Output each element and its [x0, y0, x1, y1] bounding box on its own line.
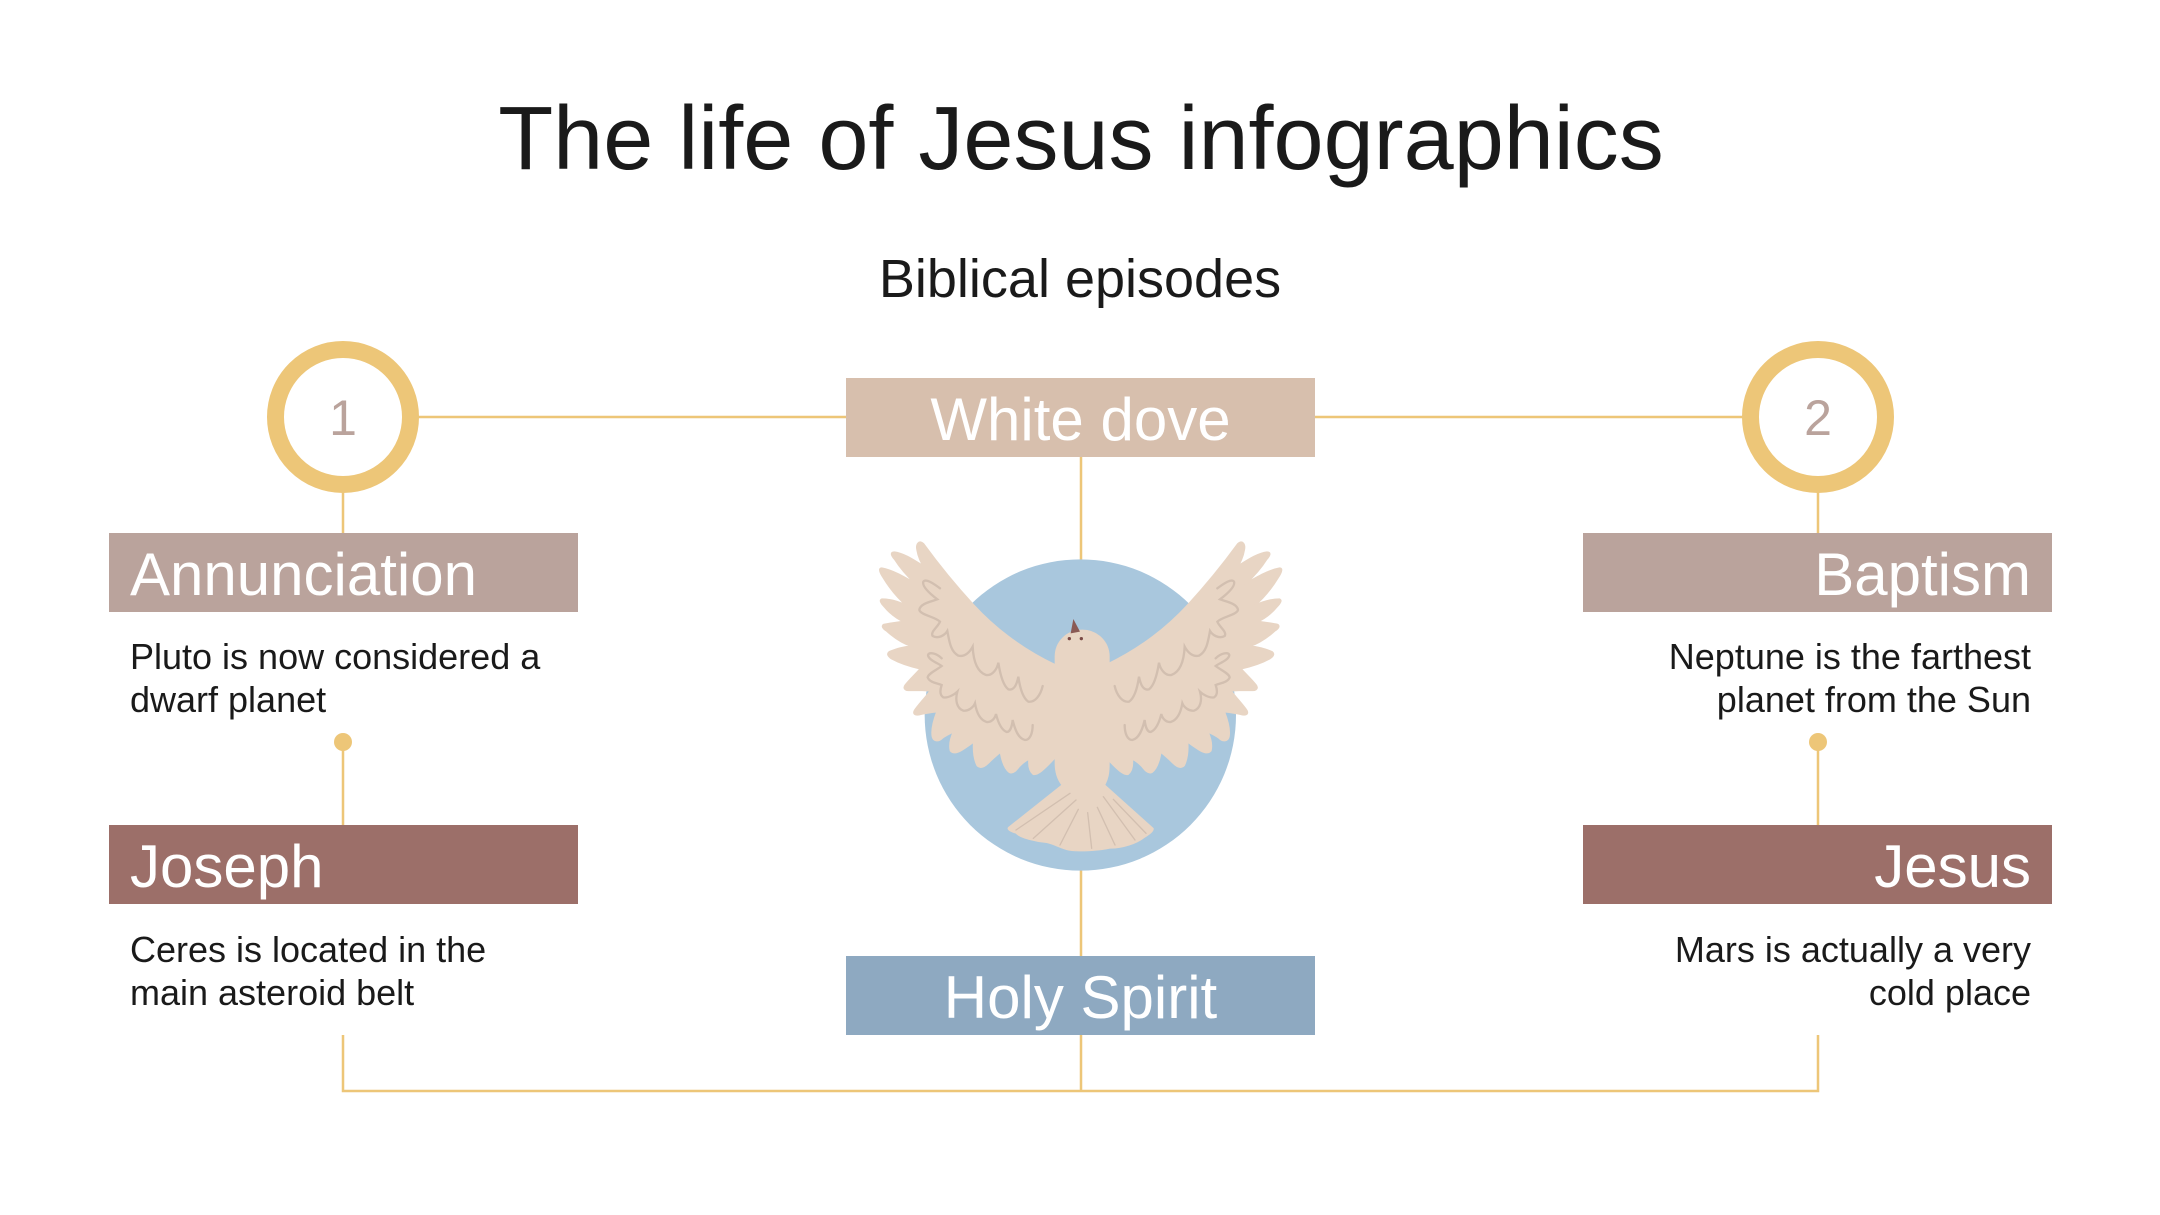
heading: Joseph: Joseph — [130, 833, 323, 900]
heading: Jesus: Jesus — [1874, 833, 2031, 900]
number 2: 2 — [1804, 390, 1832, 446]
text: Annunciation description: dwarf planet — [130, 679, 326, 720]
marker ring 2 — [1742, 341, 1894, 493]
number 1: 1 — [329, 390, 357, 446]
wing and tail feather lines — [919, 581, 1238, 848]
heading: Jesus — [1583, 825, 2052, 904]
heading: Baptism — [1583, 533, 2052, 612]
text: Baptism description: Neptune is the farthest — [1669, 636, 2031, 677]
heading: Annunciation — [109, 533, 578, 612]
text: Baptism description: planet from the Sun — [1717, 679, 2031, 720]
heading: Holy Spirit — [846, 956, 1315, 1035]
heading: White dove — [846, 378, 1315, 457]
heading: White dove: White dove — [930, 386, 1231, 453]
illustration: dove on blue circle — [879, 541, 1282, 871]
blue circle — [925, 559, 1236, 871]
text: Jesus description: cold place — [1869, 972, 2031, 1013]
text: Joseph description: main asteroid belt — [130, 972, 414, 1013]
text: Baptism description — [1669, 636, 2031, 720]
text: Joseph description — [130, 929, 486, 1013]
text: Jesus description: Mars is actually a very — [1675, 929, 2031, 970]
dove body and wings — [880, 542, 1281, 851]
heading: Baptism: Baptism — [1814, 541, 2031, 608]
dot left — [334, 733, 352, 751]
title: The life of Jesus infographics — [498, 89, 1664, 189]
beak — [1071, 619, 1080, 633]
eyes — [1068, 637, 1083, 640]
text: Joseph description: Ceres is located in the — [130, 929, 486, 970]
heading: Joseph — [109, 825, 578, 904]
subtitle: Biblical episodes — [879, 249, 1281, 309]
text: Annunciation description — [130, 636, 540, 720]
text: Annunciation description: Pluto is now considered a — [130, 636, 540, 677]
heading: Annunciation: Annunciation — [130, 541, 477, 608]
dot right — [1809, 733, 1827, 751]
text: Jesus description — [1675, 929, 2031, 1013]
heading: Holy Spirit: Holy Spirit — [944, 964, 1217, 1031]
marker ring 1 — [267, 341, 419, 493]
